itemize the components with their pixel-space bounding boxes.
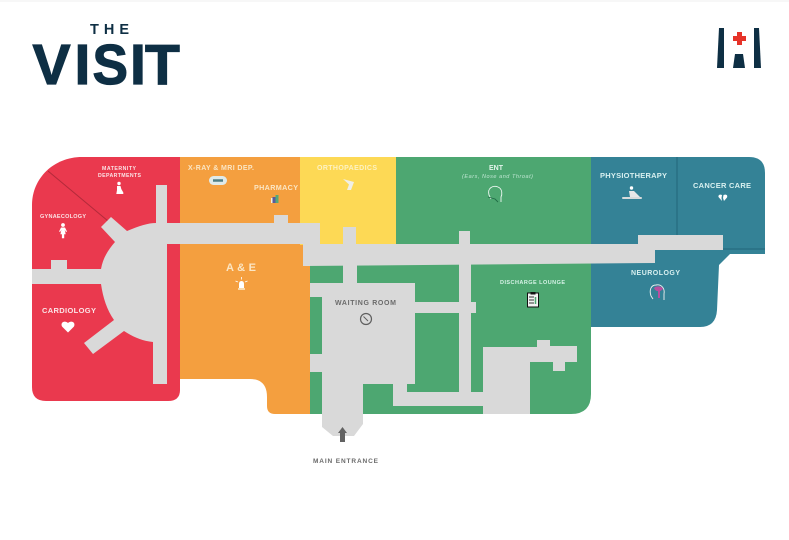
label: x-ray and MRI department: X-RAY & MRI DEP.	[188, 165, 254, 172]
label: physiotherapy: PHYSIOTHERAPY	[600, 171, 667, 180]
title: The Visit: I	[74, 33, 90, 97]
icon: physiotherapy massage	[622, 186, 642, 199]
icon: clipboard	[528, 292, 538, 307]
icon: ENT head	[488, 186, 502, 202]
panel: orthopaedics yellow zone	[300, 157, 396, 245]
floor plan	[32, 157, 765, 436]
label: A and E: A & E	[226, 262, 256, 274]
icon: alarm light	[236, 277, 248, 290]
corridors	[32, 185, 723, 436]
title: The Visit: V	[32, 33, 71, 97]
icon: clock	[360, 314, 372, 324]
label: main entrance: MAIN ENTRANCE	[313, 458, 379, 465]
title: The Visit: I	[130, 33, 146, 97]
icon: heart	[62, 322, 74, 332]
title: The Visit: S	[92, 33, 128, 97]
label: pharmacy: PHARMACY	[254, 183, 298, 192]
panel: red departments wing	[32, 157, 180, 401]
label: cancer care: CANCER CARE	[693, 181, 751, 190]
icon: woman	[59, 223, 67, 238]
label: ENT: ENT	[489, 165, 504, 172]
label: maternity departments: DEPARTMENTS	[98, 173, 142, 179]
icon: pharmacy bottles	[271, 195, 278, 203]
label: maternity departments: MATERNITY	[102, 166, 137, 172]
label: neurology: NEUROLOGY	[631, 270, 680, 277]
panel: green departments wing	[310, 157, 591, 414]
label: maternity departments	[98, 166, 142, 179]
title: The Visit: T	[145, 33, 180, 97]
title: The Visit	[32, 22, 180, 97]
icon: x-ray	[209, 176, 227, 185]
logo: hospital with red cross	[717, 28, 761, 68]
label: orthopaedics: ORTHOPAEDICS	[317, 165, 377, 172]
panel: teal departments wing	[591, 157, 765, 327]
label: waiting room: WAITING ROOM	[335, 300, 396, 307]
divider: maternity and gynaecology	[48, 171, 108, 221]
panel: orange departments wing	[180, 157, 310, 414]
label: cardiology: CARDIOLOGY	[42, 306, 96, 315]
label: ears nose and throat: (Ears, Nose and Throat)	[462, 174, 533, 180]
divider: physiotherapy and cancer care	[677, 157, 765, 249]
title: The Visit: THE	[90, 22, 129, 38]
icon: brain head	[650, 285, 664, 300]
label: gynaecology: GYNAECOLOGY	[40, 214, 86, 220]
icon: broken heart	[718, 195, 727, 201]
label: discharge lounge: DISCHARGE LOUNGE	[500, 280, 565, 286]
icon: bone joint	[343, 179, 354, 190]
icon: pregnant woman	[116, 182, 123, 194]
icon: entrance arrow	[338, 427, 347, 442]
